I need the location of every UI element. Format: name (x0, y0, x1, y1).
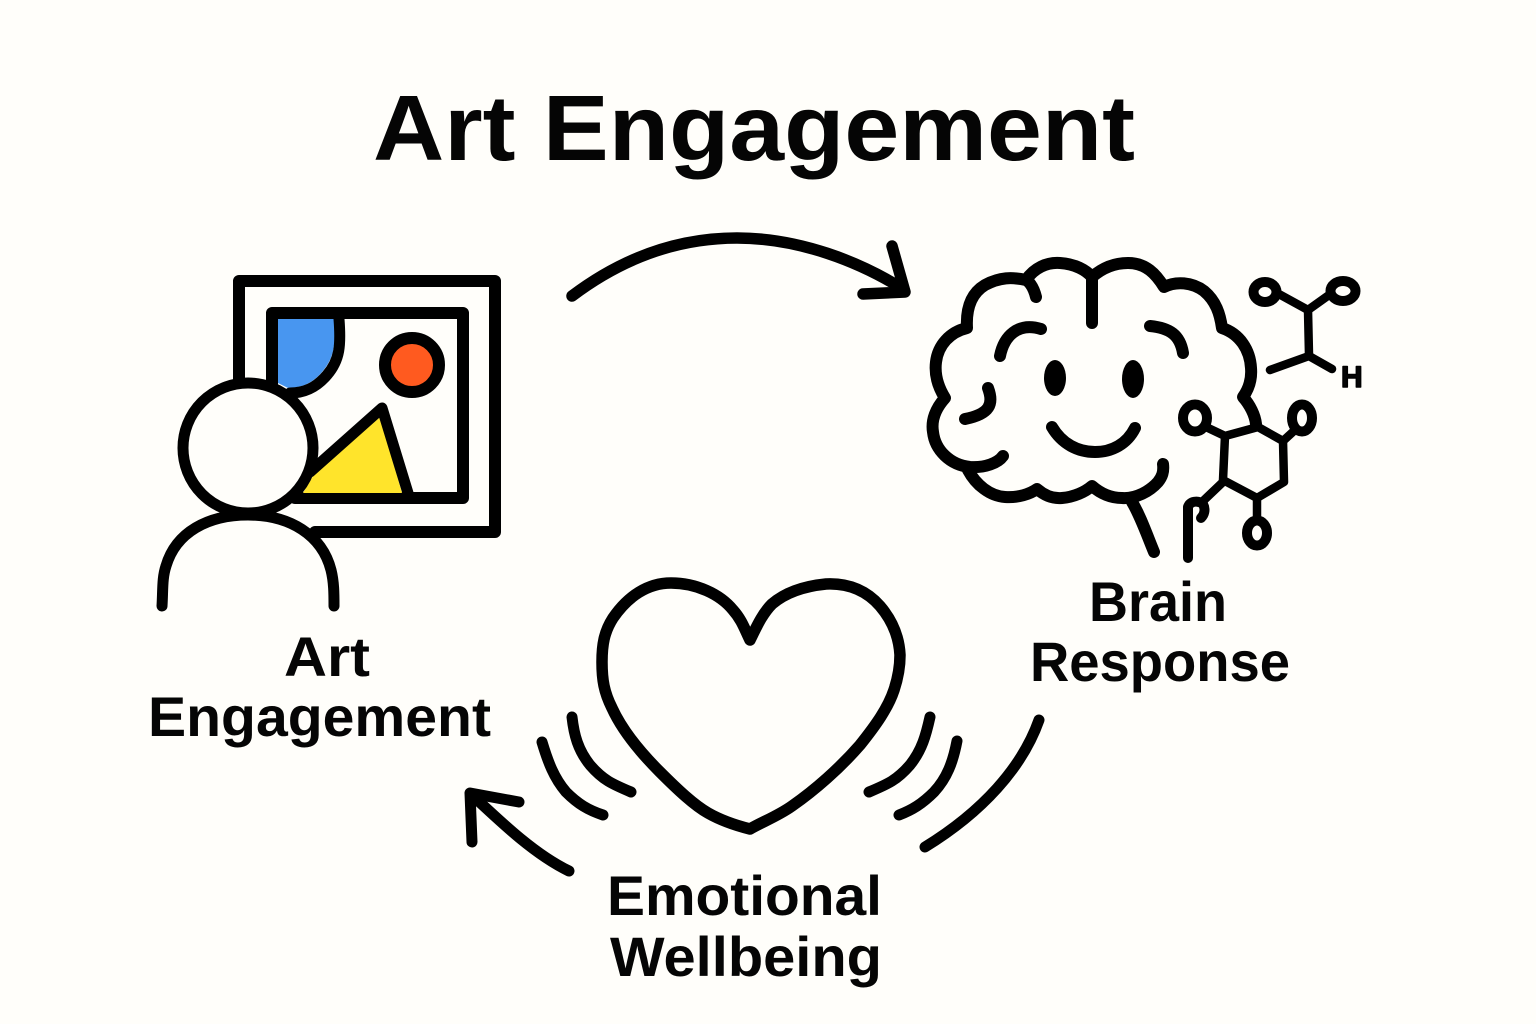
label: art engagement (148, 625, 491, 748)
label: brain response: Response (1030, 630, 1290, 693)
painting inner frame (272, 313, 463, 498)
arrow: emotional wellbeing to art engagement (470, 793, 569, 871)
yellow triangle (303, 417, 402, 493)
arrow: art engagement to brain response (572, 238, 905, 296)
painting outer frame (239, 281, 495, 532)
label: art engagement: Art (284, 625, 370, 688)
label: art engagement: Engagement (148, 685, 491, 748)
label: emotional wellbeing: Wellbeing (610, 925, 882, 988)
icon: lower molecule (1183, 404, 1312, 558)
label: emotional wellbeing: Emotional (607, 864, 882, 927)
inner folds (1000, 327, 1041, 356)
brain stem (1132, 502, 1154, 552)
eyes (1044, 360, 1066, 396)
person head (183, 383, 313, 513)
title: Art Engagement (373, 76, 1135, 180)
smile (1052, 427, 1135, 452)
brain outline (933, 278, 1036, 467)
arc left inner (572, 717, 631, 792)
heart outline (602, 583, 900, 829)
arc right outer (899, 741, 957, 815)
label: emotional wellbeing (607, 864, 882, 988)
label: brain response (1030, 570, 1290, 693)
person shoulders (162, 515, 334, 606)
icon: smiling brain (933, 263, 1256, 552)
icon: person viewing painting (162, 281, 495, 606)
orange circle (385, 338, 439, 392)
icon: heart with radiating arcs (542, 583, 957, 829)
icon: upper molecule (1254, 281, 1363, 394)
arc left outer (542, 742, 603, 815)
hydrogen label: H (1341, 361, 1363, 394)
blue shape (278, 319, 335, 388)
arc right inner (869, 717, 930, 792)
label: brain response: Brain (1089, 570, 1227, 633)
arrow: brain response to emotional wellbeing (925, 720, 1039, 847)
